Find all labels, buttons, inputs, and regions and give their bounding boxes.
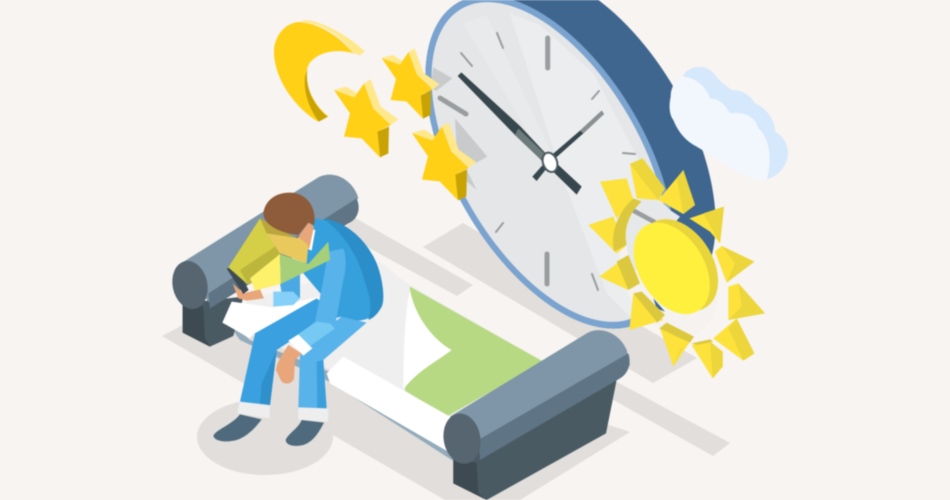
- face: [270, 223, 314, 250]
- moon: [274, 20, 365, 122]
- shirt collar: [307, 228, 315, 251]
- clock tick marks: [440, 33, 635, 290]
- hanging hand: [276, 345, 302, 384]
- sun ray shaded faces: [630, 158, 765, 378]
- sun: [588, 158, 765, 378]
- jacket shaded back: [323, 218, 383, 320]
- shoes: [213, 414, 262, 441]
- rear leg: [298, 317, 367, 409]
- white sheet band: [327, 357, 457, 457]
- front leg: [240, 298, 342, 405]
- hair: [263, 193, 315, 235]
- sun gap and ring background: [599, 200, 738, 353]
- clock face light band: [463, 13, 667, 320]
- sofa arm left: [168, 175, 359, 347]
- arm: [298, 248, 346, 343]
- phone hand: [233, 283, 264, 301]
- bed underside: [224, 318, 455, 462]
- bed sheet: [222, 262, 540, 440]
- light beam from phone: [228, 218, 330, 291]
- clock hands: [458, 72, 604, 195]
- sun ring segments: [613, 198, 713, 345]
- star lower right: [412, 122, 476, 200]
- sofa arm right: [440, 330, 630, 500]
- torso: [303, 218, 383, 321]
- sleeve light: [298, 322, 335, 347]
- star shadows on clock: [430, 67, 487, 190]
- white fold: [403, 290, 452, 389]
- star lower left: [334, 79, 398, 157]
- green blanket: [327, 287, 543, 457]
- star upper: [382, 48, 440, 119]
- sun rays: [588, 158, 765, 378]
- clock body depth: [374, 0, 767, 370]
- cloud: [670, 67, 788, 180]
- shirt cuff: [288, 334, 312, 356]
- clock: [374, 0, 767, 370]
- floor shadows: [162, 218, 730, 500]
- clock rim: [374, 0, 726, 370]
- clock face: [383, 0, 717, 361]
- paper sheet on lap: [222, 297, 320, 338]
- bed: [222, 262, 543, 462]
- sun disc face: [618, 209, 726, 328]
- sun disc edge: [625, 205, 734, 325]
- man: [213, 193, 383, 446]
- raised forearm and sleeve: [280, 273, 300, 298]
- phone: [227, 266, 249, 294]
- trouser cuffs: [237, 402, 270, 418]
